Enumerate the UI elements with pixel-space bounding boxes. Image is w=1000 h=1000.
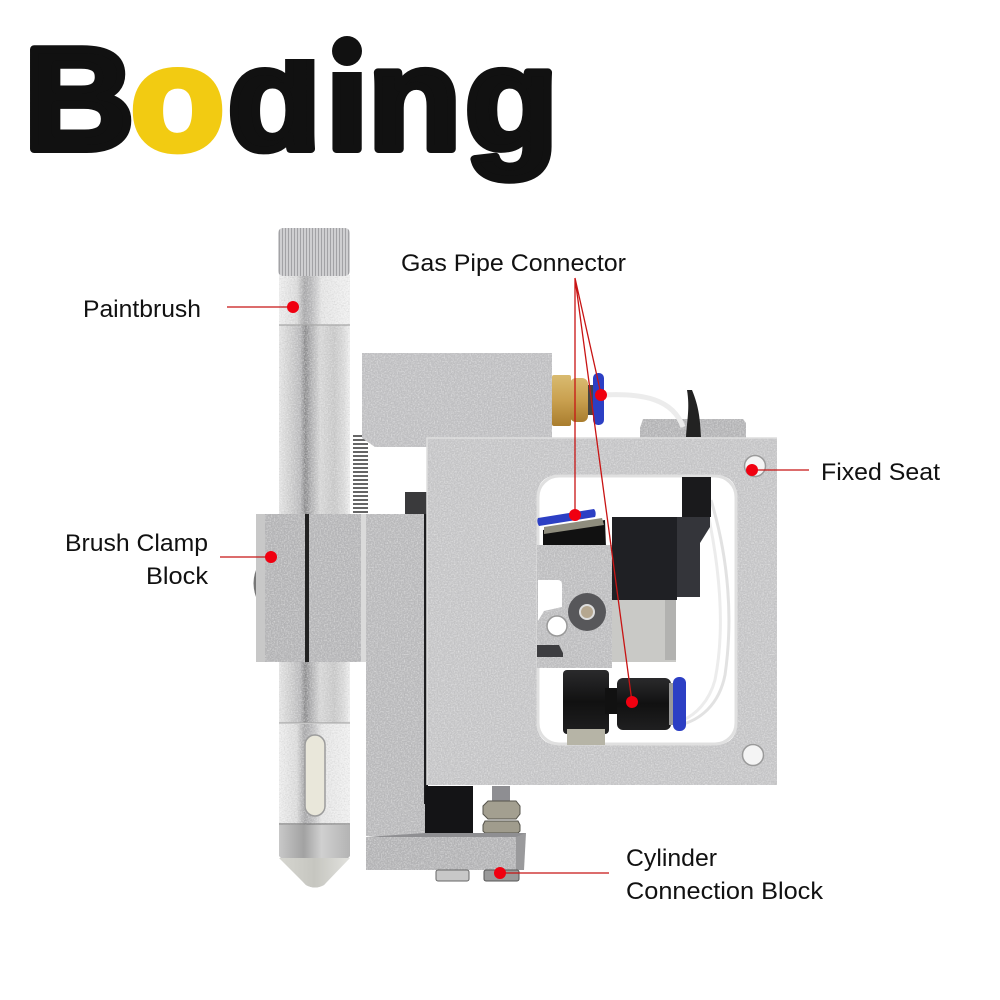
clamp screw: [254, 570, 256, 597]
logo: Boding wordmark: d: [228, 17, 321, 180]
brush clamp blocks: [256, 514, 366, 662]
cylinder connection base: [366, 833, 526, 870]
brass fitting with blue ring: [552, 373, 604, 426]
upper black fitting: [543, 520, 606, 547]
callout: Fixed Seat: [746, 459, 940, 486]
callout: Cylinder Connection Block: [494, 845, 824, 905]
callout: Brush Clamp Block: Block: [146, 563, 209, 590]
logo: Boding wordmark: g: [465, 17, 558, 180]
callout: Paintbrush: Paintbrush: [83, 296, 201, 323]
main frame plate with window: [427, 438, 777, 785]
callout: Gas Pipe Connector: Gas Pipe Connector: [401, 250, 626, 277]
logo: Boding wordmark: o: [131, 17, 224, 180]
knurled pen cap: [278, 228, 350, 276]
callout: Paintbrush: [83, 296, 299, 323]
upper block: [362, 353, 552, 447]
clear air tube loop: [680, 500, 729, 725]
clear air tube top: [603, 395, 683, 427]
aluminium actuator block: [537, 545, 612, 668]
logo: Boding wordmark: i: [326, 17, 368, 180]
paintbrush pen: [278, 228, 350, 888]
window bevel: [538, 476, 736, 744]
pen tip: [279, 825, 350, 888]
logo: Boding wordmark: [24, 17, 558, 180]
callout: Cylinder Connection Block: Cylinder: [626, 845, 717, 872]
mechanism inside window: [537, 477, 729, 745]
spring behind clamp: [353, 436, 368, 512]
upper blue ring: [537, 509, 596, 526]
callout: Brush Clamp Block: Brush Clamp: [65, 530, 208, 557]
callout: Gas Pipe Connector: [401, 250, 638, 708]
solenoid valve: [612, 600, 676, 662]
product: pneumatic paintbrush assembly: [254, 228, 777, 888]
callout: Brush Clamp Block: [65, 530, 277, 590]
piston rod: [492, 786, 510, 802]
black guide behind the clamp: [405, 492, 427, 514]
sight window: [305, 735, 325, 816]
lower black elbow fitting: [563, 670, 609, 734]
callout: Cylinder Connection Block: Connection Block: [626, 878, 824, 905]
logo: Boding wordmark: n: [368, 17, 461, 180]
vertical guide rail: [366, 514, 425, 836]
black cylinder: [425, 786, 473, 834]
bottom bolts: [436, 870, 519, 881]
lock nuts: [483, 801, 520, 833]
frame edge highlight: [427, 438, 777, 785]
top knob: [640, 419, 746, 438]
black cable: [686, 390, 701, 437]
callout: Fixed Seat: Fixed Seat: [821, 459, 940, 486]
logo: Boding wordmark: B: [24, 17, 134, 180]
mounting holes: [742, 456, 766, 766]
